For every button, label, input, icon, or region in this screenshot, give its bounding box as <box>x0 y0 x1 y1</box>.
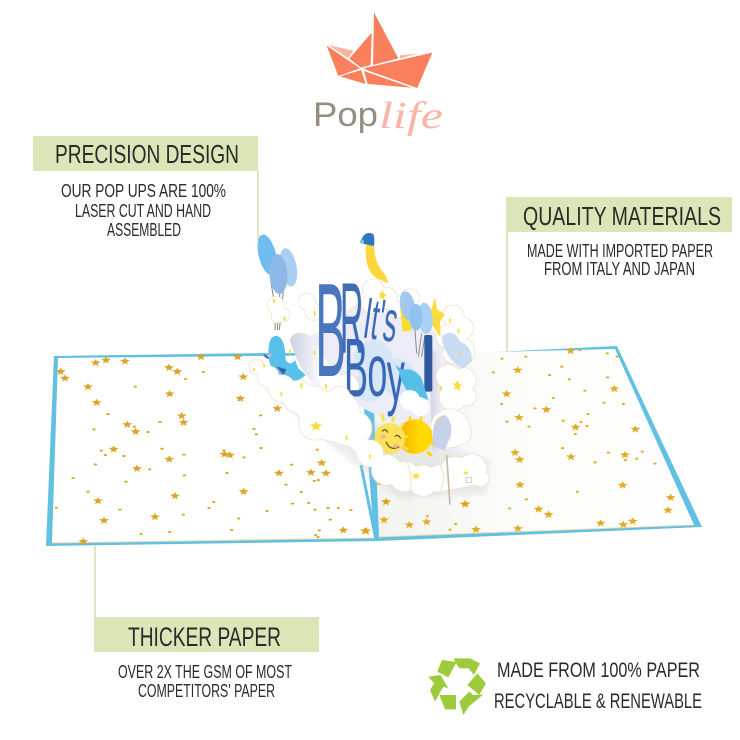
heading banner <box>94 617 319 652</box>
panel: quality materials <box>506 197 732 279</box>
back sun <box>398 417 434 456</box>
page edge tint <box>52 525 694 543</box>
right page <box>372 349 694 537</box>
soft shadow <box>263 387 490 499</box>
gold stars left page <box>55 353 370 545</box>
front sun with face <box>374 413 408 454</box>
small cloud under balloons <box>268 297 289 323</box>
panel: thicker paper <box>94 617 319 701</box>
moon with hat <box>360 233 389 283</box>
blue lettering: o <box>367 330 387 412</box>
icon: recycle arrows <box>428 658 486 715</box>
heading banner <box>506 197 732 232</box>
body text: ASSEMBLED <box>107 220 181 240</box>
back interior <box>290 297 457 455</box>
connector lines <box>95 171 507 617</box>
body text: OUR POP UPS ARE 100% <box>61 181 226 201</box>
left balloons <box>254 233 300 330</box>
body text <box>118 662 292 701</box>
upper cloud <box>437 305 475 366</box>
right cloud column <box>430 305 476 453</box>
heading banner <box>33 136 258 171</box>
panel: precision design <box>33 136 258 240</box>
logo wordmark: Pop <box>313 96 378 134</box>
body text: LASER CUT AND HAND <box>75 201 211 221</box>
callout text <box>494 659 702 713</box>
small cloud under right whale <box>400 390 429 416</box>
logo wordmark <box>313 95 443 137</box>
blue lettering: R <box>340 263 363 375</box>
fold details <box>407 462 443 492</box>
heading: PRECISION DESIGN <box>55 139 239 169</box>
cloud ribbon <box>249 359 489 496</box>
heading: THICKER PAPER <box>128 622 281 652</box>
lower blue shade <box>433 415 451 451</box>
blue lettering: B <box>344 322 368 415</box>
right whale <box>395 365 428 400</box>
logo: Poplife <box>313 12 443 137</box>
blue lettering: It's <box>360 286 402 355</box>
clouds behind lettering <box>323 340 415 408</box>
card blue border <box>46 346 702 546</box>
recycling callout <box>428 658 702 715</box>
yellow stars on clouds <box>253 289 469 479</box>
icon: origami boat <box>327 12 432 88</box>
fold line <box>361 465 376 540</box>
blue lettering: y <box>387 336 405 418</box>
left page <box>52 355 374 543</box>
pop-up card open flat <box>46 346 702 546</box>
blue lettering: B <box>315 256 346 405</box>
gold stars right page <box>361 347 676 534</box>
blue shading <box>442 333 472 369</box>
body text <box>61 181 226 240</box>
middle cloud <box>436 365 476 411</box>
body text: COMPETITORS' PAPER <box>138 681 275 701</box>
pop-up sculpture: It's a Boy clouds <box>249 233 490 508</box>
logo wordmark: life <box>379 95 443 137</box>
left whale <box>264 336 306 382</box>
gold stars on page in front of sculpture <box>381 498 470 508</box>
lower cloud <box>431 409 471 448</box>
upper cloud chain <box>298 279 419 320</box>
body text: OVER 2X THE GSM OF MOST <box>118 662 292 682</box>
body text <box>527 241 713 279</box>
lavender wall <box>430 350 443 453</box>
right balloons and stars <box>397 290 445 357</box>
inner cloud ribbon <box>290 333 347 395</box>
front cloud band <box>249 359 489 505</box>
